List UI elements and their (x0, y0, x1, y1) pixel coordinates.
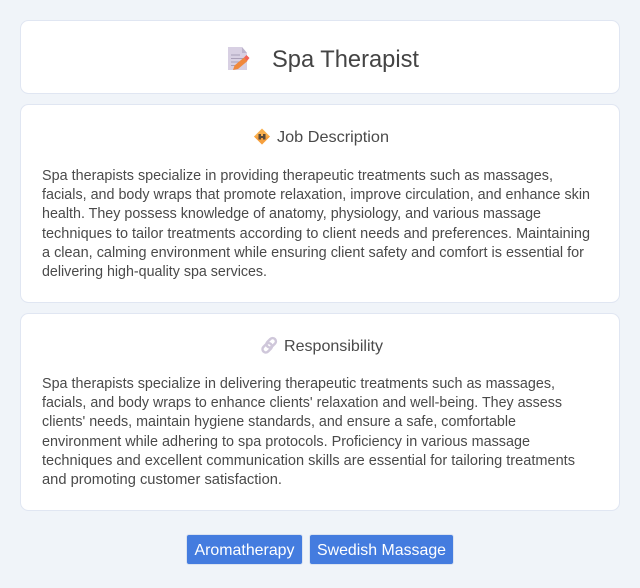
panel: title (20, 20, 620, 94)
text block: responsibility body: techniques and excellent communication skills are essential for tailoring treatments (42, 453, 575, 469)
tag: Aromatherapy (186, 534, 302, 564)
panel: job description (20, 104, 620, 302)
icon: chain link (261, 337, 277, 354)
tag: Aromatherapy: Aromatherapy (194, 542, 294, 559)
text block: responsibility body: and promoting customer satisfaction. (42, 472, 282, 488)
tag: Swedish Massage: Swedish Massage (317, 542, 446, 559)
heading: Job Description: Job Description (277, 129, 389, 146)
text block: job description body: health. They possess knowledge of anatomy, physiology, and various massage (42, 206, 541, 222)
text block: responsibility body: Spa therapists specialize in delivering therapeutic treatments such as massages, (42, 376, 555, 392)
text block: responsibility body (42, 376, 575, 488)
text block: job description body (42, 168, 590, 280)
text block: job description body: techniques to tailor treatments according to client needs and preferences. Maintaining (42, 226, 590, 242)
text block: job description body: a clean, calming environment while ensuring client safety and comfort is essential for (42, 245, 584, 261)
text block: job description body: delivering high-quality spa services. (42, 264, 267, 280)
text block: responsibility body: facials, and body wraps to enhance clients' relaxation and well-being. They assess (42, 395, 562, 411)
heading: Spa Therapist: Spa Therapist (272, 46, 419, 73)
text block: job description body: facials, and body wraps that promote relaxation, improve circulation, and enhance skin (42, 187, 590, 203)
icon: orange diamond (254, 128, 270, 144)
text block: responsibility body: clients' needs, maintain hygiene standards, and ensure a safe, comfortable (42, 414, 516, 430)
text block: responsibility body: environment while adhering to spa protocols. Proficiency in various massage (42, 434, 530, 450)
panel: responsibility (20, 314, 620, 510)
tag: Swedish Massage (310, 534, 454, 564)
icon: document with pencil (228, 47, 250, 70)
text block: job description body: Spa therapists specialize in providing therapeutic treatments such as massages, (42, 168, 553, 184)
heading: Responsibility: Responsibility (284, 338, 383, 355)
